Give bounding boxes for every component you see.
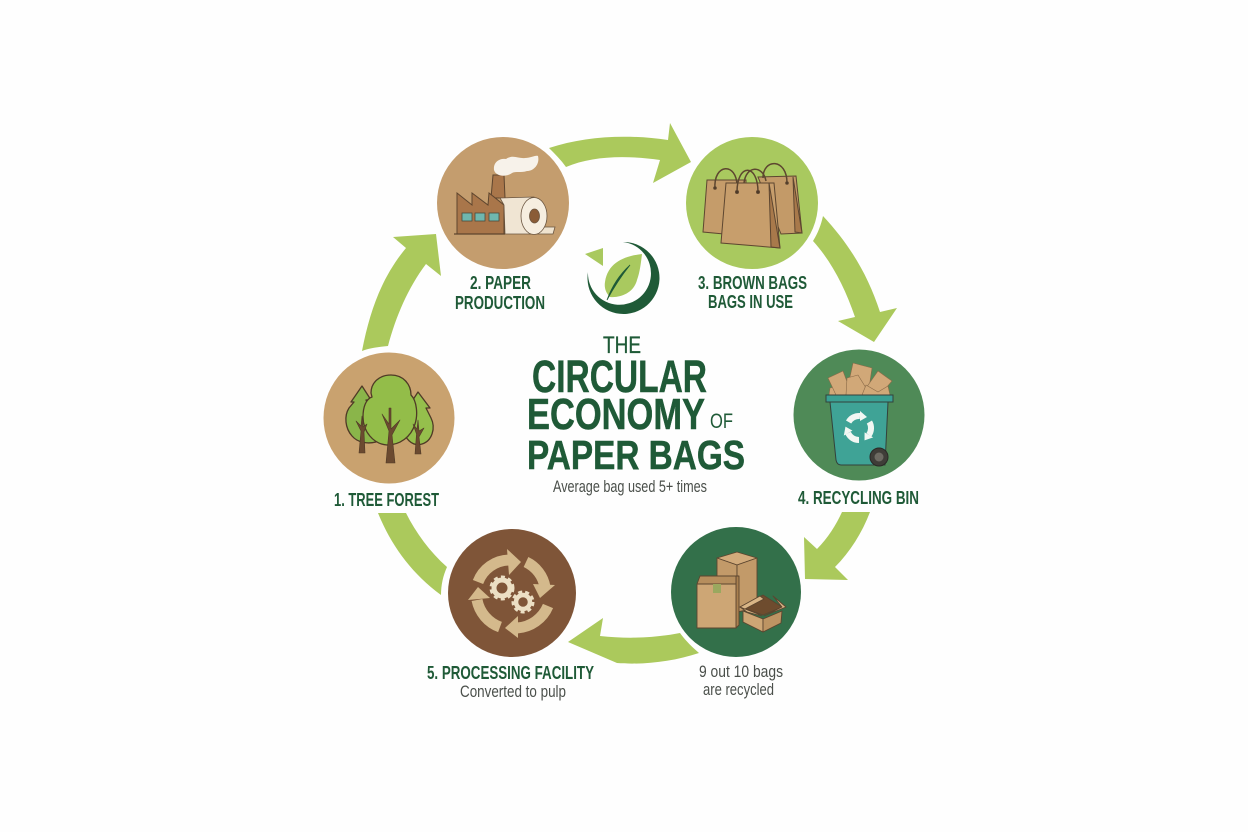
title: THE [603,332,641,359]
label: paper production: PRODUCTION [455,293,545,313]
step 6: recycled boxes [671,527,801,657]
title [527,332,745,478]
icon: front bag [721,170,780,248]
icon: gears [491,577,533,612]
icon: recycle symbol [840,411,879,446]
label: brown bags in use: BAGS IN USE [708,292,793,312]
step 4: recycling bin [794,350,924,480]
icon: bin body [830,402,888,465]
label: tree forest: 1. TREE FOREST [334,490,439,510]
label: paper production: 2. PAPER [470,273,531,293]
icon: crumpled paper [828,363,892,395]
step 1: tree forest [324,352,454,484]
logo arrow tip [585,248,603,266]
title: ECONOMY [527,391,705,439]
icon: bin lid [826,395,893,402]
arrow: paper production to brown bags [549,123,691,183]
circle: brown background [448,529,576,657]
arrow: brown bags to recycling bin [813,216,897,342]
icon: paper roll [500,197,555,234]
icon: tall box [717,552,757,612]
title: PAPER BAGS [527,432,745,478]
label: brown bags in use: 3. BROWN BAGS [698,273,807,293]
logo ring [587,242,659,314]
subtitle: Average bag used 5+ times [553,478,707,496]
icon: back right bag [758,164,802,234]
step 3: brown bags [686,137,818,269]
label: recycling statistic: 9 out 10 bags [699,663,783,681]
step 2: paper production [437,137,569,269]
arrow: tree forest to paper production [362,234,441,351]
label: processing facility [427,663,594,701]
icon: circular arrows [468,549,555,638]
circle: tan background [324,352,454,484]
arrow: processing facility to tree forest [378,513,447,595]
label: recycling statistic [699,663,783,699]
step 5: processing facility [448,529,576,657]
circle: green background [794,350,924,480]
icon: open box [740,595,786,632]
icon: front box [697,576,739,628]
icon: factory chimney [491,175,505,198]
label: paper production [455,273,545,313]
label: processing facility: Converted to pulp [460,683,566,701]
circle: dark green background [671,527,801,657]
icon: smoke [494,156,538,176]
label: brown bags in use [698,273,807,312]
icon: trees [346,375,433,463]
label: recycling bin: 4. RECYCLING BIN [798,488,919,508]
icon: factory windows [462,213,499,221]
logo: leaf in circle [585,242,659,314]
logo leaf [605,254,642,297]
circle: tan background [437,137,569,269]
arrow: boxes to processing facility [568,618,699,664]
icon: back left bag [703,169,766,236]
title: OF [710,410,733,433]
icon: bin wheel [870,448,888,466]
arrow: recycling bin to boxes [804,512,870,580]
title: CIRCULAR [532,351,707,402]
icon: factory building [457,193,504,234]
circle: light green background [686,137,818,269]
logo leaf stem [607,265,630,300]
label: recycling statistic: are recycled [703,681,774,699]
label: processing facility: 5. PROCESSING FACILITY [427,663,594,683]
